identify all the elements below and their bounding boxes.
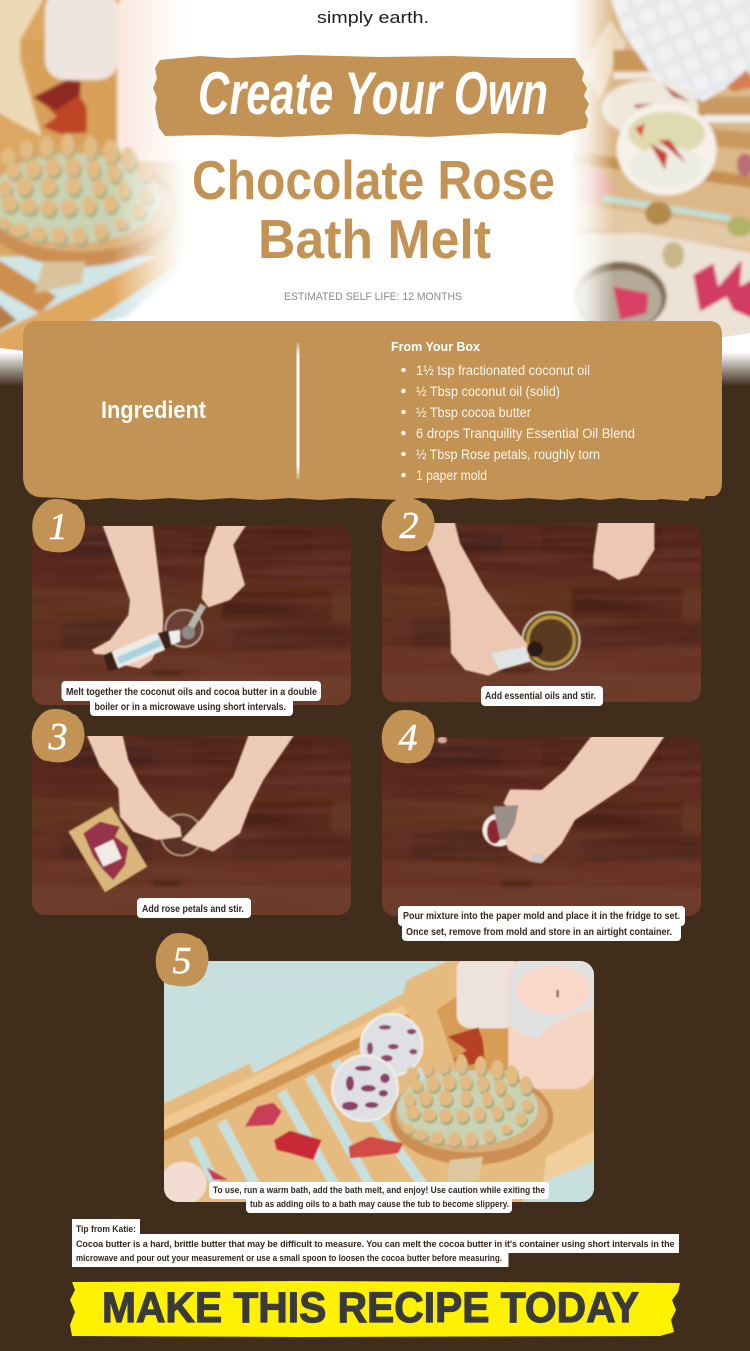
step 2 photo (382, 523, 701, 702)
step 4 (372, 710, 712, 941)
tip from Katie: Tip from Katie: (76, 1224, 136, 1234)
tip from Katie: microwave and pour out your measurement or use a small spoon to loosen the cocoa butter before measuring. (76, 1253, 502, 1263)
ingredient list: ½ Tbsp coconut oil (solid) (416, 384, 560, 399)
ingredient list: 1½ tsp fractionated coconut oil (416, 363, 590, 378)
ingredient list: From Your Box (391, 340, 480, 354)
badge 5 (156, 933, 209, 986)
title: Chocolate Rose (192, 149, 555, 211)
step 2 (372, 498, 712, 713)
ingredient list (391, 340, 635, 483)
badge 2: 2 (400, 505, 418, 547)
panel: ingredients (23, 321, 722, 501)
badge 3 (32, 709, 85, 762)
caption 2: Add essential oils and stir. (485, 691, 596, 702)
step 1 photo (32, 526, 351, 705)
title (192, 149, 555, 270)
step 5 (156, 933, 603, 1213)
ingredient list: 6 drops Tranquility Essential Oil Blend (416, 426, 635, 441)
caption 5: To use, run a warm bath, add the bath melt, and enjoy! Use caution while exiting the (213, 1185, 545, 1195)
caption 3 (137, 898, 251, 918)
badge 4: 4 (398, 717, 418, 759)
caption 1 (62, 681, 321, 716)
title: Bath Melt (258, 208, 491, 270)
caption 5 (209, 1182, 549, 1213)
badge 2 (382, 498, 435, 551)
step 4 photo (382, 737, 701, 916)
badge 3: 3 (48, 716, 68, 758)
caption 4: Pour mixture into the paper mold and place it in the fridge to set. (403, 911, 680, 922)
ingredient list: ½ Tbsp Rose petals, roughly torn (416, 447, 600, 462)
badge 1 (32, 499, 85, 552)
call to action banner: MAKE THIS RECIPE TODAY (102, 1284, 639, 1332)
tip from Katie: Cocoa butter is a hard, brittle butter that may be difficult to measure. You can melt the cocoa butter in it's container using short intervals in the (76, 1239, 674, 1249)
caption 5: tub as adding oils to a bath may cause the tub to become slippery. (250, 1199, 509, 1209)
caption 1: Melt together the coconut oils and cocoa butter in a double (66, 687, 317, 698)
header: white area with photo collage (0, 0, 750, 386)
step 3 photo (32, 736, 351, 915)
logo: simply earth: simply earth. (317, 8, 429, 27)
tip from Katie (72, 1219, 679, 1267)
ingredient list: ½ Tbsp cocoa butter (416, 405, 531, 420)
ingredient list: 1 paper mold (416, 468, 487, 483)
caption 1: boiler or in a microwave using short intervals. (94, 702, 286, 713)
ingredient heading: Ingredient (101, 397, 206, 424)
header photo: towel, melts and roses (574, 0, 750, 338)
header photo: bath brush and candles (0, 0, 181, 351)
step 3 (22, 709, 362, 926)
badge 1: 1 (48, 506, 68, 548)
caption 3: Add rose petals and stir. (142, 904, 244, 915)
badge 4 (382, 710, 435, 763)
badge 5: 5 (172, 940, 192, 982)
caption 4 (398, 906, 685, 941)
step 1 (22, 499, 362, 716)
brush banner: Create Your Own (153, 55, 589, 137)
script heading: Create Your Own (198, 60, 548, 127)
shelf life note: ESTIMATED SELF LIFE: 12 MONTHS (284, 291, 462, 303)
caption 4: Once set, remove from mold and store in an airtight container. (406, 927, 672, 938)
step 5 photo (157, 953, 603, 1210)
caption 2 (481, 686, 603, 706)
